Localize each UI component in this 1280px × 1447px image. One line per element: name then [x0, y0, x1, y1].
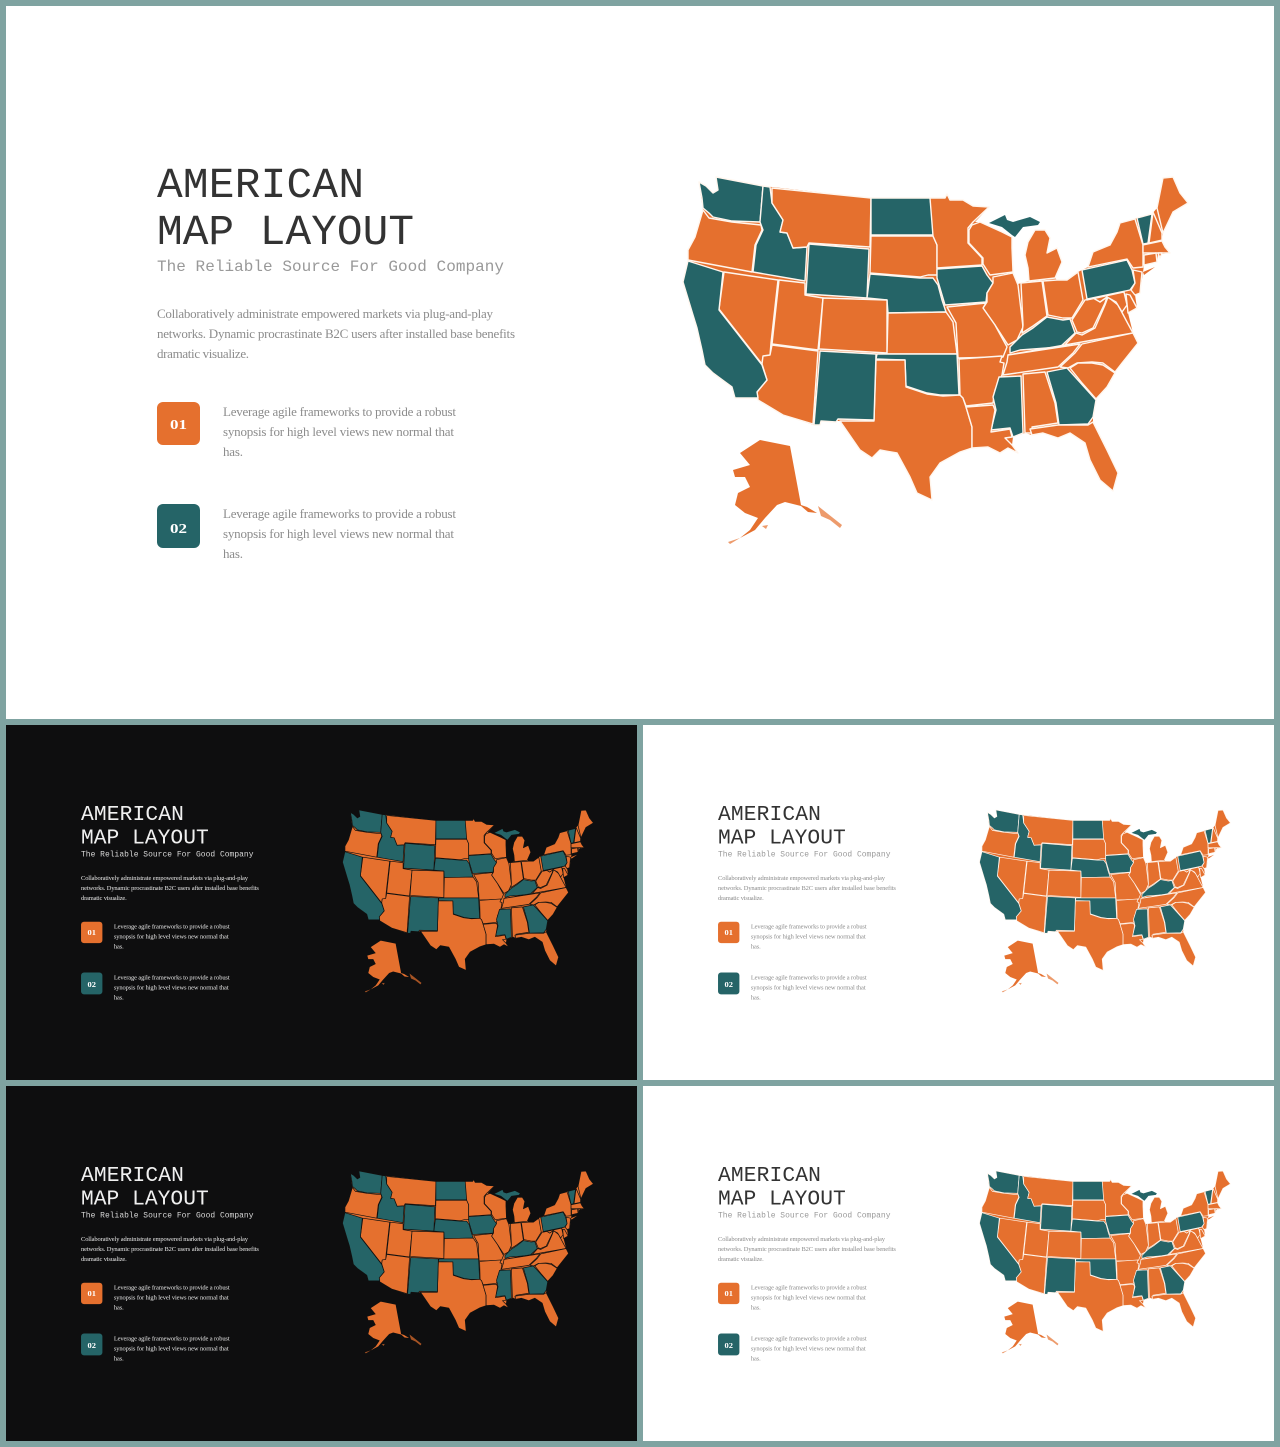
item 02 text: [114, 1335, 230, 1362]
item 02 text: Leverage agile frameworks to provide a robust: [114, 1335, 230, 1342]
map: United States: [683, 177, 1188, 544]
item 02 text: Leverage agile frameworks to provide a robust: [751, 1335, 867, 1342]
state: Washington: [699, 177, 763, 222]
badge 02: [157, 504, 200, 548]
item 01 text: has.: [114, 944, 124, 951]
state: Maryland: [1087, 292, 1127, 312]
state: Indiana: [1021, 281, 1047, 333]
intro paragraph: networks. Dynamic procrastinate B2C users after installed base benefits: [157, 326, 515, 341]
panel: dark slide bottom left: [6, 1086, 637, 1441]
title: [81, 1164, 209, 1211]
title: AMERICAN: [718, 1164, 821, 1188]
state: Oklahoma: [876, 354, 959, 395]
state: Colorado: [819, 298, 887, 353]
intro paragraph: networks. Dynamic procrastinate B2C users after installed base benefits: [718, 1246, 896, 1253]
intro paragraph: networks. Dynamic procrastinate B2C users after installed base benefits: [81, 1246, 259, 1253]
state: Montana: [772, 188, 871, 248]
intro paragraph: Collaboratively administrate empowered markets via plug-and-play: [718, 1236, 886, 1243]
badge 01: 01: [170, 418, 187, 433]
state: Long Island: [1143, 267, 1155, 275]
map: United States: [979, 1171, 1230, 1353]
panel: main light slide: [6, 6, 1274, 719]
badge 01: 01: [724, 929, 734, 937]
title: AMERICAN: [81, 803, 184, 827]
state: Nevada: [719, 272, 778, 364]
intro paragraph: [718, 1236, 896, 1263]
item 01 text: Leverage agile frameworks to provide a robust: [751, 1285, 867, 1292]
item 02 text: Leverage agile frameworks to provide a robust: [114, 974, 230, 981]
badge 02: [718, 972, 739, 994]
item 01 text: synopsis for high level views new normal that: [114, 934, 229, 941]
item 02 text: synopsis for high level views new normal that: [114, 1345, 229, 1352]
subtitle: The Reliable Source For Good Company: [81, 1212, 254, 1221]
state: Ohio: [1043, 272, 1083, 318]
state: Missouri: [947, 303, 1007, 358]
state: Kansas: [887, 312, 957, 354]
title: AMERICAN: [157, 161, 364, 210]
intro paragraph: dramatic visualize.: [81, 895, 127, 902]
item 02 text: [751, 974, 867, 1001]
state: Maine: [1157, 177, 1188, 233]
state: South Dakota: [870, 236, 937, 277]
state: Iowa: [937, 266, 993, 305]
state: Kentucky: [1010, 317, 1075, 353]
item 01 text: has.: [223, 444, 243, 459]
state: New York: [1088, 219, 1143, 268]
state: Alabama: [1023, 372, 1058, 433]
state: California: [683, 261, 767, 398]
badge 01: 01: [724, 1290, 734, 1298]
islands: Aleutians: [728, 538, 740, 544]
title: AMERICAN: [81, 1164, 184, 1188]
badge 01: [81, 922, 102, 943]
state: Georgia: [1047, 368, 1096, 425]
intro paragraph: Collaboratively administrate empowered markets via plug-and-play: [718, 875, 886, 882]
title: MAP LAYOUT: [718, 826, 846, 850]
panel: light slide top right: [643, 725, 1274, 1080]
state: Connecticut: [1144, 253, 1157, 265]
item 02 text: has.: [751, 994, 761, 1001]
intro paragraph: networks. Dynamic procrastinate B2C users after installed base benefits: [718, 885, 896, 892]
title: [81, 803, 209, 850]
state: South Carolina: [1070, 363, 1115, 399]
map silhouette backing: [683, 177, 1188, 500]
state: Alaska: [733, 440, 817, 538]
title: [718, 1164, 846, 1211]
badge 02: 02: [724, 981, 734, 989]
intro paragraph: dramatic visualize.: [157, 346, 249, 361]
intro paragraph: [718, 875, 896, 902]
subtitle: The Reliable Source For Good Company: [157, 258, 504, 276]
item 01 text: Leverage agile frameworks to provide a robust: [751, 924, 867, 931]
intro paragraph: dramatic visualize.: [718, 895, 764, 902]
island: Kodiak: [762, 525, 768, 529]
islands: Alaska panhandle: [818, 506, 842, 528]
item 01 text: Leverage agile frameworks to provide a robust: [114, 924, 230, 931]
state: Delaware and Eastern Shore: [1126, 294, 1137, 313]
state: Minnesota: [930, 194, 989, 268]
item 01 text: synopsis for high level views new normal that: [751, 1295, 866, 1302]
title line two: MAP LAYOUT: [157, 208, 414, 257]
intro paragraph: Collaboratively administrate empowered markets via plug-and-play: [81, 875, 249, 882]
state: Michigan upper peninsula: [989, 215, 1040, 237]
badge 01: [718, 922, 739, 943]
item 01 text: [751, 924, 867, 951]
state: Vermont: [1137, 214, 1152, 244]
title: [718, 803, 846, 850]
state: Utah: [772, 280, 823, 350]
item 02 text: Leverage agile frameworks to provide a robust: [223, 506, 456, 521]
item 02 text: has.: [114, 994, 124, 1001]
badge 01: [718, 1283, 739, 1304]
intro paragraph: Collaboratively administrate empowered markets via plug-and-play: [81, 1236, 249, 1243]
state: West Virginia: [1072, 297, 1107, 333]
intro paragraph: Collaboratively administrate empowered markets via plug-and-play: [157, 306, 494, 321]
state: Rhode Island: [1158, 253, 1162, 258]
badge 01: [81, 1283, 102, 1304]
item 01 text: synopsis for high level views new normal that: [751, 934, 866, 941]
state: New Mexico: [814, 351, 876, 425]
item 02 text: synopsis for high level views new normal that: [223, 526, 454, 541]
intro paragraph: dramatic visualize.: [81, 1256, 127, 1263]
item 02 text: has.: [751, 1355, 761, 1362]
item 01 text: synopsis for high level views new normal that: [114, 1295, 229, 1302]
badge 01: [157, 402, 200, 445]
item 02 text: [751, 1335, 867, 1362]
item 02 text: has.: [114, 1355, 124, 1362]
state: Tennessee: [1003, 344, 1080, 375]
badge 02: [718, 1333, 739, 1355]
intro paragraph: [157, 306, 515, 361]
state: Oregon: [688, 210, 762, 272]
map: United States: [979, 810, 1230, 992]
state: Mississippi: [991, 376, 1023, 437]
item 02 text: synopsis for high level views new normal that: [751, 1345, 866, 1352]
title: MAP LAYOUT: [718, 1187, 846, 1211]
intro paragraph: [81, 1236, 259, 1263]
state: North Dakota: [871, 198, 935, 235]
badge 01: 01: [87, 929, 97, 937]
badge 02: 02: [170, 522, 187, 537]
item 01 text: [114, 924, 230, 951]
item 02 text: synopsis for high level views new normal that: [114, 984, 229, 991]
title: MAP LAYOUT: [81, 1187, 209, 1211]
item 01 text: [751, 1285, 867, 1312]
state: New Jersey: [1131, 270, 1142, 295]
state: New Hampshire: [1149, 212, 1162, 243]
item 01 text: has.: [751, 944, 761, 951]
state: Illinois: [983, 273, 1023, 345]
state: Idaho: [753, 186, 807, 281]
state: Wisconsin: [969, 222, 1013, 275]
state: Pennsylvania: [1082, 260, 1135, 299]
state: Michigan lower peninsula: [1025, 230, 1062, 281]
map: United States: [342, 1171, 593, 1353]
badge 02: [81, 1333, 102, 1355]
state: Arizona: [757, 345, 818, 424]
intro paragraph: networks. Dynamic procrastinate B2C users after installed base benefits: [81, 885, 259, 892]
title: MAP LAYOUT: [81, 826, 209, 850]
item 01 text: has.: [114, 1305, 124, 1312]
state: Louisiana: [966, 405, 1018, 453]
badge 02: [81, 972, 102, 994]
item 02 text: [114, 974, 230, 1001]
panel: dark slide top left: [6, 725, 637, 1080]
state: North Carolina: [1060, 333, 1138, 372]
badge 02: 02: [87, 1342, 97, 1350]
item 01 text: synopsis for high level views new normal that: [223, 424, 454, 439]
item 02 text: [223, 506, 456, 561]
title: AMERICAN: [718, 803, 821, 827]
badge 02: 02: [87, 981, 97, 989]
subtitle: The Reliable Source For Good Company: [81, 851, 254, 860]
item 02 text: synopsis for high level views new normal that: [751, 984, 866, 991]
state: Florida: [1030, 422, 1118, 491]
item 02 text: has.: [223, 546, 243, 561]
badge 02: 02: [724, 1342, 734, 1350]
intro paragraph: dramatic visualize.: [718, 1256, 764, 1263]
state: Virginia: [1008, 297, 1133, 355]
subtitle: The Reliable Source For Good Company: [718, 851, 891, 860]
state: Massachusetts: [1143, 241, 1170, 253]
state: Nebraska: [867, 274, 946, 313]
panel: light slide bottom right: [643, 1086, 1274, 1441]
item 01 text: [114, 1285, 230, 1312]
item 01 text: has.: [751, 1305, 761, 1312]
state: Wyoming: [806, 244, 869, 298]
item 01 text: Leverage agile frameworks to provide a robust: [114, 1285, 230, 1292]
state: Arkansas: [959, 356, 1004, 406]
badge 01: 01: [87, 1290, 97, 1298]
item 01 text: [223, 404, 456, 459]
item 02 text: Leverage agile frameworks to provide a robust: [751, 974, 867, 981]
subtitle: The Reliable Source For Good Company: [718, 1212, 891, 1221]
state: Texas: [840, 360, 972, 500]
item 01 text: Leverage agile frameworks to provide a robust: [223, 404, 456, 419]
intro paragraph: [81, 875, 259, 902]
map: United States: [342, 810, 593, 992]
